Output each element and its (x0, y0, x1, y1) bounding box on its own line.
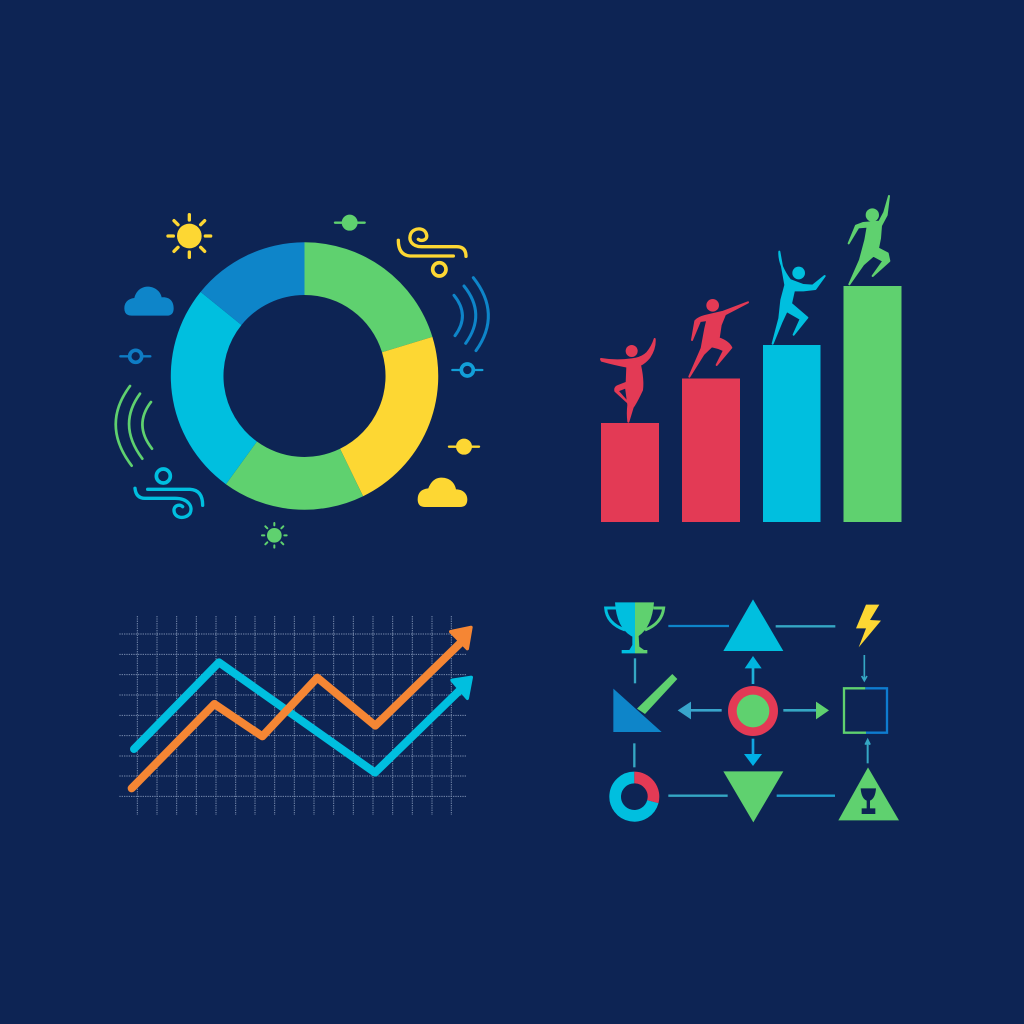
icon: blue cloud (124, 287, 174, 316)
line: cyan with arrow (134, 662, 471, 773)
icon: lightning bolt (856, 605, 881, 647)
panel: line chart with grid (119, 616, 471, 815)
figure: green winner (849, 196, 889, 284)
connector: inverted triangle to trophy triangle (777, 792, 835, 799)
icon: blue ring slider right (452, 364, 482, 376)
figure: cyan jumper (773, 252, 825, 344)
figure: red runner (689, 299, 748, 377)
icon: cyan wind (135, 469, 203, 517)
connector: trophy to triangle (668, 622, 729, 629)
arrow: right (783, 702, 829, 719)
panel: flow diagram of shapes (606, 599, 899, 822)
arrow: bolt to square (862, 655, 867, 681)
icon: trophy (606, 602, 664, 653)
icon: yellow sun (168, 215, 211, 257)
icon: green small sun (262, 523, 287, 548)
bar: green tallest (844, 286, 902, 522)
icon: blue sound arcs (454, 278, 488, 351)
connector: trophy to triangle ruler (631, 658, 638, 683)
icon: green sound arcs (116, 386, 152, 466)
arrow: down (744, 739, 762, 766)
connector: triangle to bolt (776, 623, 835, 630)
arrow: left (678, 702, 722, 719)
panel: bar chart with climbing figures (601, 196, 902, 522)
icon: yellow slider dot (449, 439, 479, 455)
icon: outlined square (844, 688, 887, 733)
arrow: up (745, 656, 762, 684)
bar: red medium (682, 378, 740, 522)
panel: donut chart with weather icons (116, 215, 488, 548)
icon: yellow cloud (418, 478, 467, 507)
grid (119, 616, 467, 815)
icon: green slider dot (335, 215, 365, 231)
figure: red dancer (601, 339, 655, 422)
connector: donut to inverted triangle (668, 792, 728, 799)
icon: blue right triangle with green bar (613, 674, 677, 732)
arrow: trophy triangle to square (865, 740, 870, 763)
icon: small donut (615, 777, 653, 816)
connector: ruler to donut (631, 743, 638, 767)
icon: cyan triangle (723, 599, 783, 651)
bar: red short (601, 423, 659, 522)
bar: cyan tall (763, 345, 820, 522)
icon: green triangle with trophy (838, 767, 899, 820)
donut chart (171, 242, 438, 510)
icon: blue ring slider left (120, 350, 150, 362)
weather icons (116, 215, 488, 548)
line: orange with arrow (132, 627, 471, 788)
icon: center circle (728, 686, 778, 736)
icon: yellow wind (398, 229, 466, 276)
icon: green inverted triangle (723, 771, 783, 822)
